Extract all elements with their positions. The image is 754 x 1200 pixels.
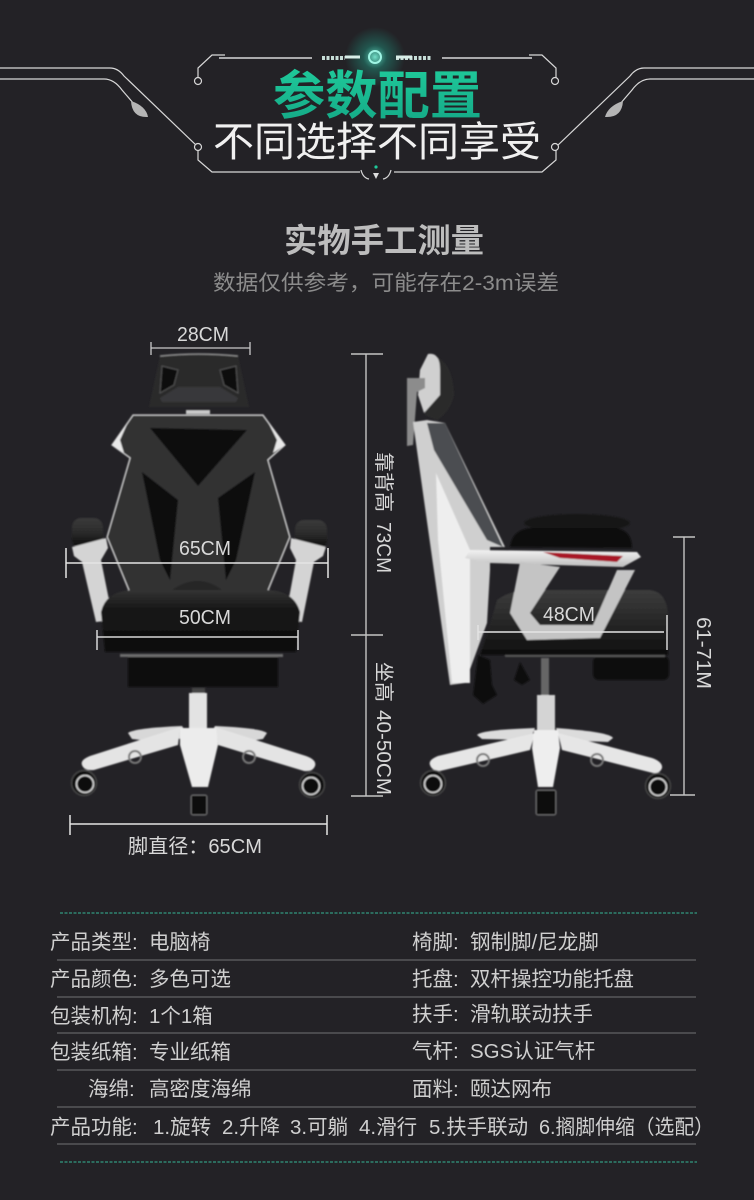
spec rows left <box>50 931 252 1101</box>
subtitle: 不同选择不同享受 <box>213 119 541 165</box>
spec rows left: 包装机构: <box>50 1005 138 1028</box>
spec rows left: 1个1箱 <box>149 1005 213 1028</box>
product functions row: 4.滑行 <box>359 1116 417 1139</box>
chair side view <box>407 354 670 815</box>
dimension: headrest width <box>151 324 250 355</box>
spec rows right: 扶手: <box>412 1003 459 1026</box>
spec rows right: 托盘: <box>412 968 459 991</box>
dimension: armrest height: 61-71M <box>692 617 714 689</box>
casters <box>72 751 324 815</box>
product functions row: 1.旋转 <box>153 1116 211 1139</box>
footrest box <box>120 654 283 687</box>
product functions row: 产品功能: <box>50 1116 138 1139</box>
spec rows left: 产品颜色: <box>50 968 138 991</box>
spec rows right <box>412 931 634 1101</box>
dimension: vertical heights <box>351 354 395 796</box>
dimension: vertical heights: 40-50CM <box>372 710 394 795</box>
spec rows left: 电脑椅 <box>149 931 210 954</box>
right armrest <box>285 520 327 622</box>
side column <box>537 658 555 731</box>
small bottom marker <box>373 165 379 179</box>
dimension: vertical heights: 坐高 <box>372 662 395 702</box>
side knobs <box>473 655 530 704</box>
dimension: armrest height <box>670 537 714 795</box>
spec rows right: 滑轨联动扶手 <box>470 1003 593 1026</box>
side arm pad <box>510 514 632 548</box>
spec rows left: 高密度海绵 <box>149 1078 252 1101</box>
product functions row <box>50 1116 714 1139</box>
spec rows right: 气杆: <box>412 1040 459 1063</box>
spec rows left: 产品类型: <box>50 931 138 954</box>
headrest <box>149 354 249 414</box>
product functions row: 3.可躺 <box>290 1116 348 1139</box>
seat cushion <box>101 590 300 652</box>
left armrest <box>72 518 113 622</box>
spec rows right: 椅脚: <box>412 931 459 954</box>
backrest <box>107 415 290 593</box>
product functions row: 5.扶手联动 <box>429 1116 528 1139</box>
section heading: 实物手工测量 <box>284 222 484 259</box>
dimension: seat width: 50CM <box>179 607 231 629</box>
side star base <box>430 728 662 787</box>
chair front view <box>72 354 327 815</box>
spec rows left: 海绵: <box>88 1078 135 1101</box>
side seat <box>480 590 669 680</box>
glowing emblem <box>322 27 431 87</box>
product functions row: 6.搁脚伸缩（选配） <box>539 1116 714 1139</box>
spec rows left: 包装纸箱: <box>50 1041 138 1064</box>
dimension: headrest width: 28CM <box>177 324 229 346</box>
side headrest <box>407 354 454 446</box>
dimension: vertical heights: 73CM <box>372 522 394 573</box>
dimension: back width <box>66 538 328 578</box>
spec rows left: 专业纸箱 <box>149 1041 231 1064</box>
dimension: seat depth: 48CM <box>543 604 595 626</box>
dimension: back width: 65CM <box>179 538 231 560</box>
product functions row: 2.升降 <box>222 1116 280 1139</box>
section note: 数据仅供参考，可能存在2-3m误差 <box>213 272 559 295</box>
side casters <box>420 754 670 815</box>
header frame ornament <box>0 55 754 179</box>
spec rows right: 双杆操控功能托盘 <box>470 968 634 991</box>
spec table <box>50 913 714 1162</box>
spec rows left: 多色可选 <box>149 968 231 991</box>
title: 参数配置 <box>273 68 482 126</box>
dimension: seat width <box>97 607 298 650</box>
gas column <box>189 688 207 731</box>
spec rows right: 钢制脚/尼龙脚 <box>470 931 599 954</box>
spec rows right: SGS认证气杆 <box>470 1040 595 1063</box>
side back frame <box>413 420 505 685</box>
spec rows right: 颐达网布 <box>470 1078 552 1101</box>
side armrest <box>465 550 641 640</box>
dimension: vertical heights: 靠背高 <box>372 452 395 512</box>
dimension: seat depth <box>478 604 667 650</box>
spec rows right: 面料: <box>412 1078 459 1101</box>
dimension: base diameter <box>70 815 327 858</box>
dimension: base diameter: 脚直径：65CM <box>128 835 262 858</box>
star base <box>82 726 315 787</box>
